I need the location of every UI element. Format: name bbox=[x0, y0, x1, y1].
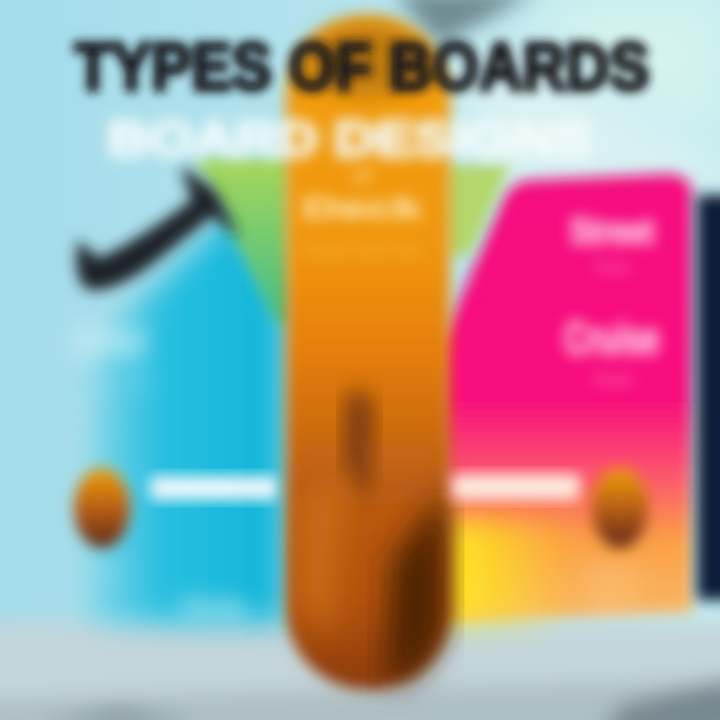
left caption: Wheels bbox=[74, 565, 126, 582]
title: TYPES OF BOARDS bbox=[74, 29, 650, 105]
left caption bbox=[74, 565, 248, 625]
deck text: shape and size bbox=[302, 242, 422, 259]
deck text bbox=[302, 166, 423, 259]
right text block two bbox=[564, 312, 660, 388]
left white label bar bbox=[150, 476, 278, 500]
floor band bbox=[0, 622, 720, 720]
right caption: Speed bbox=[589, 591, 635, 608]
deck text: Deck bbox=[302, 192, 423, 225]
left caption: Ride bbox=[182, 592, 248, 625]
panel: left cyan bbox=[90, 205, 285, 622]
panel: pink right bbox=[440, 174, 692, 622]
skateboard deck bbox=[286, 16, 450, 690]
subtitle: BOARD DESIGNS bbox=[108, 111, 592, 167]
right caption: Wheels bbox=[586, 565, 638, 582]
icon: black swoosh bbox=[76, 165, 240, 290]
right white label bar bbox=[452, 474, 580, 500]
panel: green triangle bbox=[196, 158, 290, 322]
right text block two: Cruise bbox=[564, 312, 660, 364]
left text block: Old bbox=[75, 318, 145, 365]
right text block one bbox=[570, 211, 655, 275]
left text block bbox=[69, 318, 151, 391]
right caption bbox=[586, 565, 638, 608]
right text block one: Street bbox=[570, 211, 655, 253]
panel: green right sliver bbox=[445, 165, 510, 255]
panel: yellow glow bbox=[440, 520, 570, 622]
right wheel icon bbox=[592, 468, 648, 548]
left text block: School style bbox=[69, 375, 151, 391]
deck text: of bbox=[354, 166, 371, 186]
right text block one: Tricks bbox=[593, 260, 631, 275]
right text block two: Travel bbox=[592, 372, 632, 388]
panel: dark navy strip bbox=[697, 195, 720, 600]
left wheel icon bbox=[74, 468, 130, 548]
